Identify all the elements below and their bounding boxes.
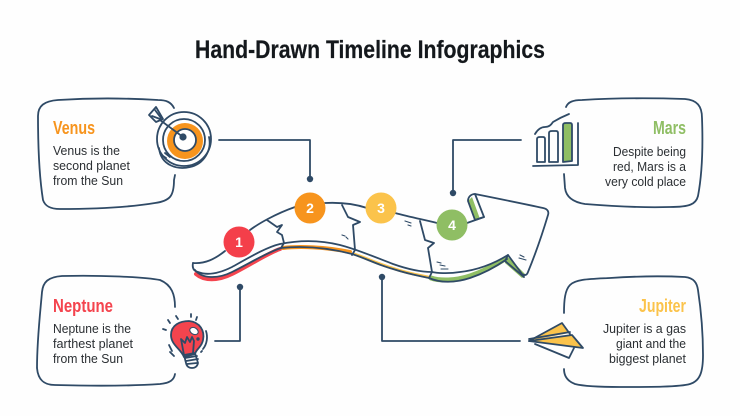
Jupiter description: biggest planet bbox=[609, 352, 686, 366]
Neptune description bbox=[53, 322, 134, 366]
Venus description: from the Sun bbox=[53, 174, 123, 188]
panel: Mars bbox=[564, 98, 702, 207]
Venus panel outline bbox=[38, 98, 175, 209]
Jupiter description: Jupiter is a gas bbox=[603, 322, 686, 336]
Neptune description: Neptune is the bbox=[53, 322, 131, 336]
Venus description: second planet bbox=[53, 159, 130, 173]
ribbon: green segment bbox=[431, 259, 505, 280]
panel: Jupiter bbox=[564, 276, 703, 387]
step 4 bbox=[436, 210, 468, 240]
panel: Venus bbox=[38, 98, 175, 209]
Venus description bbox=[53, 144, 130, 188]
fold: green edges bbox=[468, 197, 526, 278]
Neptune panel outline bbox=[37, 276, 175, 386]
icon: paper airplane bbox=[529, 323, 583, 358]
Mars description: red, Mars is a bbox=[613, 160, 686, 174]
arrow tail and lower band bbox=[193, 241, 432, 274]
Mars description: very cold place bbox=[605, 175, 686, 189]
step 3 bbox=[366, 192, 396, 224]
Jupiter description bbox=[603, 322, 686, 366]
connector: Venus to 2 bbox=[219, 140, 313, 182]
Jupiter description: giant and the bbox=[616, 337, 686, 351]
icon: light bulb bbox=[163, 314, 207, 368]
step 2: 2 bbox=[306, 200, 314, 216]
title: Hand-Drawn Timeline Infographics bbox=[195, 36, 545, 64]
ribbon: orange segment bbox=[283, 247, 350, 252]
cracks bbox=[267, 220, 284, 248]
Mars panel outline bbox=[564, 98, 702, 207]
arrow outline bbox=[193, 194, 548, 275]
step 3: 3 bbox=[377, 200, 385, 216]
Mars heading: Mars bbox=[653, 118, 686, 138]
Mars description bbox=[605, 145, 686, 189]
timeline arrow bbox=[193, 194, 548, 282]
step 4: 4 bbox=[448, 217, 456, 233]
arrow fold bbox=[468, 194, 484, 220]
connector: Neptune to 1 bbox=[215, 284, 243, 341]
icon: bar chart bbox=[533, 114, 578, 166]
Jupiter heading: Jupiter bbox=[639, 296, 686, 316]
Venus heading: Venus bbox=[53, 118, 95, 138]
ribbon: yellow segment bbox=[354, 254, 428, 277]
step 1: 1 bbox=[235, 234, 243, 250]
Venus description: Venus is the bbox=[53, 144, 120, 158]
Neptune description: from the Sun bbox=[53, 352, 123, 366]
ribbon: red segment bbox=[196, 249, 280, 279]
connector: Jupiter to arrow bbox=[379, 274, 520, 341]
panel: Neptune bbox=[37, 276, 175, 386]
Mars description: Despite being bbox=[613, 145, 686, 159]
Neptune heading: Neptune bbox=[53, 296, 113, 316]
Jupiter panel outline bbox=[564, 276, 703, 387]
connector: Mars to 4 bbox=[450, 140, 521, 196]
Neptune description: farthest planet bbox=[53, 337, 134, 351]
step 2 bbox=[294, 192, 326, 224]
step 1 bbox=[224, 226, 254, 258]
icon: target with arrow bbox=[149, 107, 211, 168]
